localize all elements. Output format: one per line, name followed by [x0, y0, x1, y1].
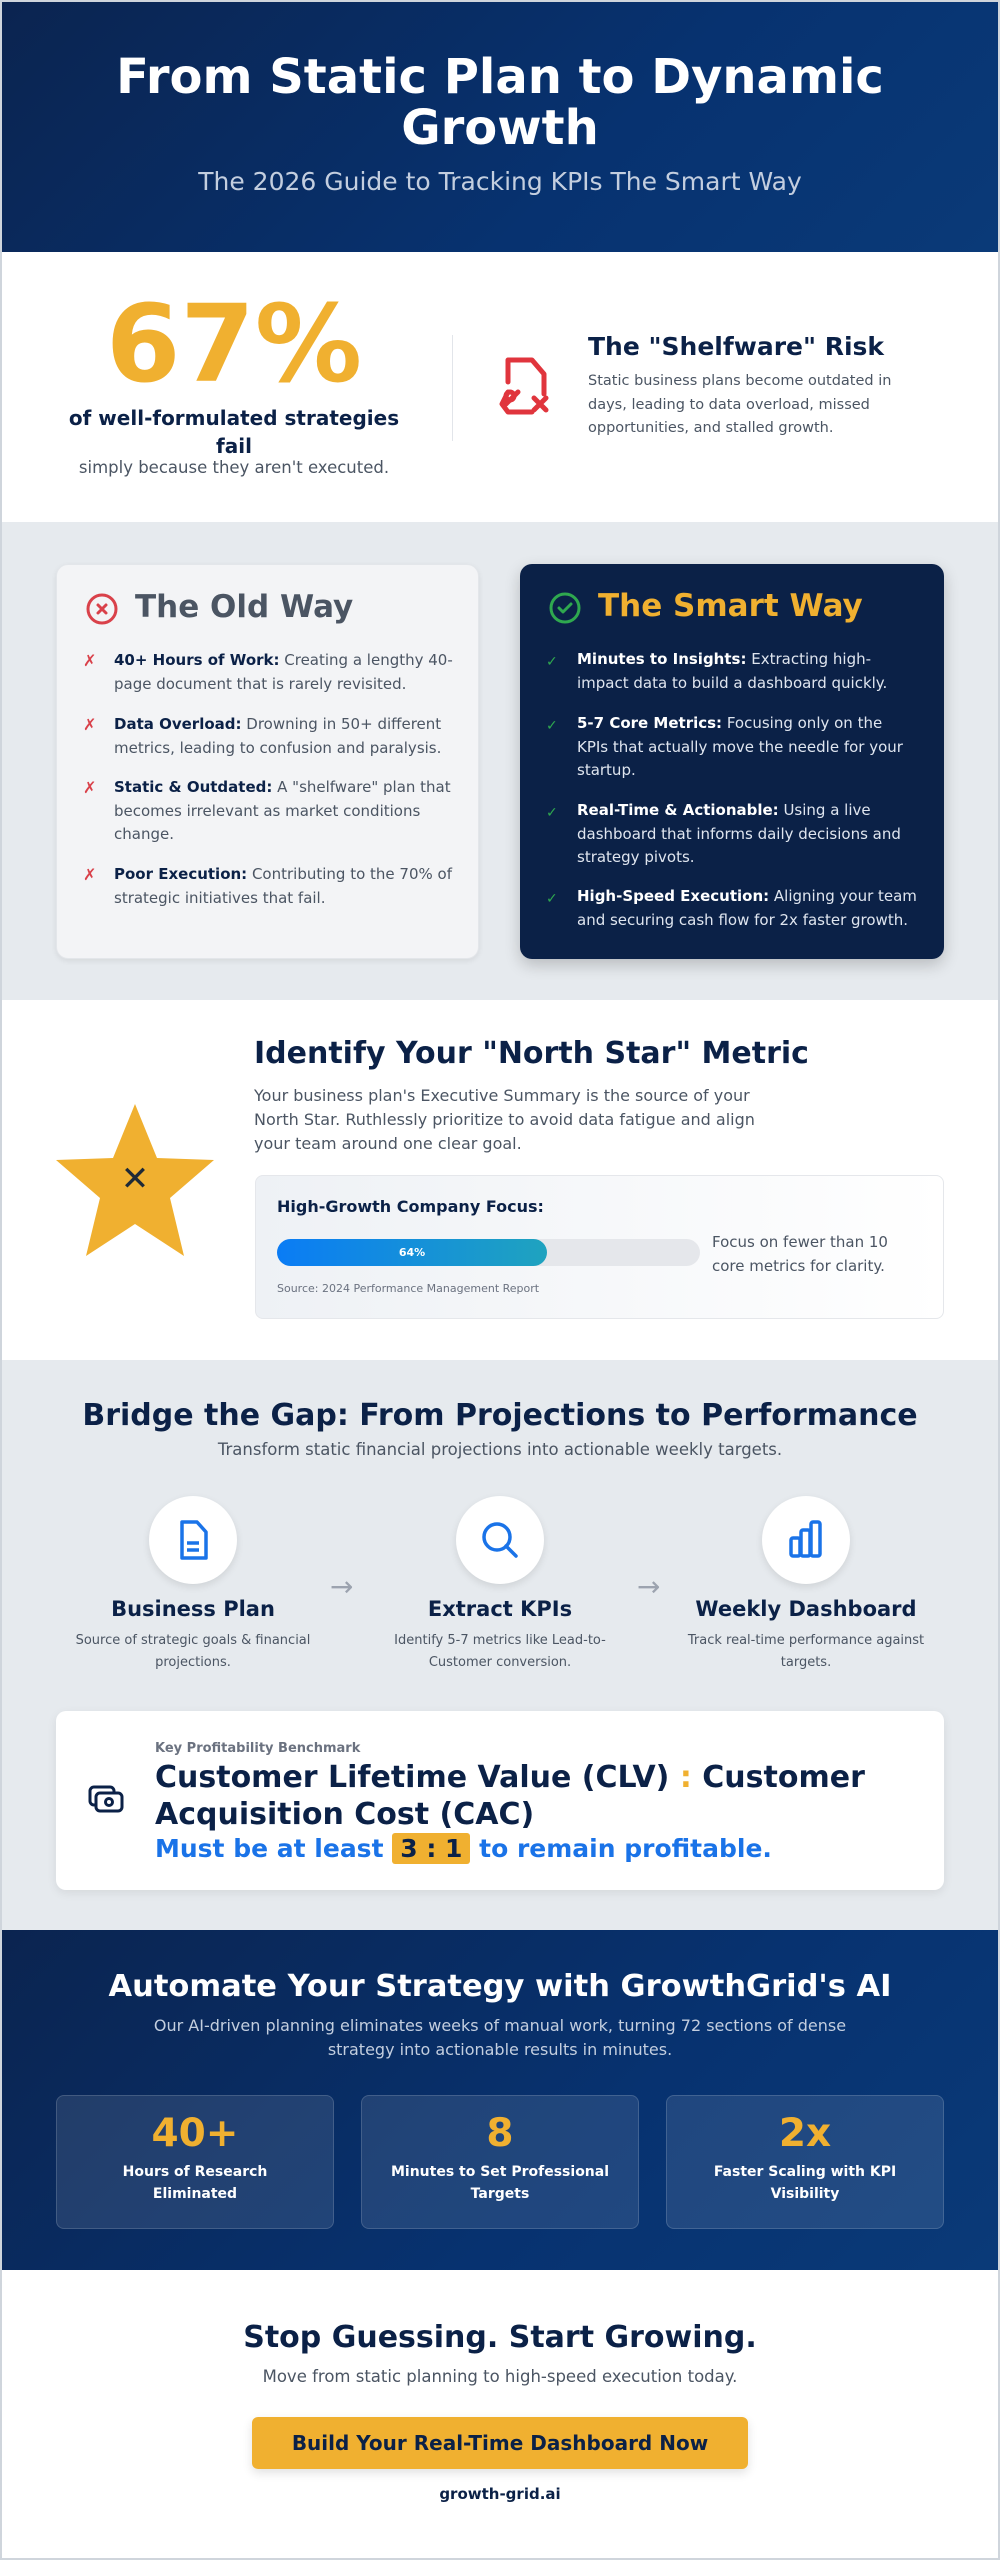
old list: 40+ Hours of Work: Creating a lengthy 40-page document that is rarely revisited.: [114, 651, 453, 692]
panel: stat: [0, 252, 1000, 522]
step: business plan: Source of strategic goals & financial projections.: [76, 1633, 310, 1670]
smart list: ✓: [546, 891, 558, 907]
bar chart: 64%: [399, 1246, 425, 1259]
step: extract kpis: Extract KPIs: [428, 1597, 572, 1621]
panel: automate: [0, 1930, 1000, 2270]
automate text: Our AI-driven planning eliminates weeks of manual work, turning 72 sections of dense strategy into actionable results in minutes.: [154, 2016, 846, 2059]
stat 40+: 40+: [152, 2111, 238, 2156]
north star text: Your business plan's Executive Summary is the source of your North Star. Ruthlessly prioritize to avoid data fatigue and align your team around one clear goal.: [254, 1086, 755, 1153]
stat caption: of well-formulated strategies: [69, 406, 399, 430]
old list: Poor Execution: Contributing to the 70% of strategic initiatives that fail.: [114, 865, 452, 906]
step: extract kpis: Identify 5-7 metrics like Lead-to-Customer conversion.: [394, 1633, 606, 1670]
shelfware title: The "Shelfware" Risk: [588, 332, 884, 361]
title: Growth: [401, 100, 599, 156]
step: weekly dashboard: Track real-time performance against targets.: [688, 1633, 924, 1670]
title: From Static Plan to Dynamic: [116, 49, 884, 105]
focus heading: High-Growth Company Focus:: [277, 1197, 544, 1216]
cta title: Stop Guessing. Start Growing.: [243, 2320, 757, 2355]
cta subtitle: Move from static planning to high-speed execution today.: [263, 2367, 737, 2386]
stat caption: [69, 406, 399, 458]
step: weekly dashboard: Weekly Dashboard: [695, 1597, 917, 1621]
header: [0, 0, 1000, 252]
icon: check circle: [550, 592, 580, 624]
callout: CLV benchmark: Must be at least 3 : 1 to remain profitable.: [155, 1834, 772, 1863]
heading smart way: The Smart Way: [598, 588, 863, 624]
old list: ✗: [83, 715, 96, 734]
stat 40+: Eliminated: [153, 2186, 237, 2202]
panel: bridge the gap: [0, 1360, 1000, 1930]
heading old way: The Old Way: [135, 589, 353, 625]
panel: old way: [56, 564, 479, 959]
bridge title: Bridge the Gap: From Projections to Performance: [82, 1398, 918, 1433]
arrow: →: [637, 1570, 660, 1603]
stat 40+: [56, 2095, 334, 2229]
shelfware text: Static business plans become outdated in days, leading to data overload, missed opportunities, and stalled growth.: [588, 373, 891, 436]
source: Source: 2024 Performance Management Report: [277, 1282, 539, 1295]
stat 8: 8: [486, 2111, 514, 2156]
step: extract kpis: [394, 1496, 606, 1670]
smart list: 5-7 Core Metrics: Focusing only on the KPIs that actually move the needle for your startup.: [577, 714, 903, 779]
old list: ✗: [83, 651, 96, 670]
north star title: Identify Your "North Star" Metric: [254, 1036, 809, 1071]
smart list: ✓: [546, 654, 558, 670]
step: weekly dashboard: [688, 1496, 924, 1670]
focus box: [255, 1175, 944, 1319]
button: [252, 2417, 748, 2469]
icon: magnifier: [456, 1496, 544, 1584]
stat 2x: 2x: [779, 2111, 831, 2156]
old list: Data Overload: Drowning in 50+ different metrics, leading to confusion and paralysis.: [114, 715, 441, 756]
callout: CLV benchmark: Customer Lifetime Value (CLV) : Customer Acquisition Cost (CAC): [155, 1760, 865, 1832]
stat caption: fail: [216, 434, 252, 458]
icon: shelfware: [500, 358, 548, 414]
automate title: Automate Your Strategy with GrowthGrid's AI: [109, 1969, 891, 2004]
step: business plan: [76, 1496, 310, 1670]
smart list: ✓: [546, 805, 558, 821]
callout: CLV benchmark: Key Profitability Benchmark: [155, 1741, 360, 1756]
old list: ✗: [83, 865, 96, 884]
arrow: →: [330, 1570, 353, 1603]
button: Build Your Real-Time Dashboard Now: [292, 2431, 708, 2455]
callout: CLV benchmark: [56, 1711, 944, 1890]
old list: [83, 651, 453, 906]
url: growth-grid.ai: [439, 2485, 561, 2503]
stat 2x: Visibility: [771, 2186, 839, 2202]
panel: comparison: [0, 522, 1000, 1000]
smart list: [546, 650, 917, 928]
panel: north star: [0, 1000, 1000, 1360]
icon: bar chart: [762, 1496, 850, 1584]
stat 8: Minutes to Set Professional: [391, 2164, 609, 2180]
stat 40+: Hours of Research: [123, 2164, 267, 2180]
old list: ✗: [83, 778, 96, 797]
big stat 67%: 67%: [106, 283, 362, 407]
icon: star: ✕: [121, 1159, 149, 1199]
subtitle: The 2026 Guide to Tracking KPIs The Smart Way: [198, 167, 802, 196]
icon: x circle: [86, 594, 118, 624]
panel: smart way: [520, 564, 944, 959]
title: [116, 49, 884, 156]
step: business plan: Business Plan: [111, 1597, 275, 1621]
icon: star: [56, 1104, 214, 1256]
icon: money: [88, 1786, 124, 1812]
bar chart: [277, 1239, 700, 1266]
smart list: ✓: [546, 718, 558, 734]
stat 8: Targets: [471, 2186, 529, 2202]
stat 2x: Faster Scaling with KPI: [714, 2164, 896, 2180]
stat 2x: [666, 2095, 944, 2229]
stat subcaption: simply because they aren't executed.: [79, 458, 389, 477]
bridge subtitle: Transform static financial projections into actionable weekly targets.: [218, 1440, 782, 1459]
smart list: Real-Time & Actionable: Using a live dashboard that informs daily decisions and strategy pivots.: [577, 801, 901, 866]
smart list: Minutes to Insights: Extracting high-impact data to build a dashboard quickly.: [577, 650, 887, 692]
focus note: Focus on fewer than 10 core metrics for clarity.: [712, 1233, 888, 1275]
icon: document: [149, 1496, 237, 1584]
old list: Static & Outdated: A "shelfware" plan that becomes irrelevant as market conditions change.: [114, 778, 451, 843]
panel: CTA: [0, 2270, 1000, 2560]
stat 8: [361, 2095, 639, 2229]
smart list: High-Speed Execution: Aligning your team and securing cash flow for 2x faster growth.: [577, 887, 917, 928]
